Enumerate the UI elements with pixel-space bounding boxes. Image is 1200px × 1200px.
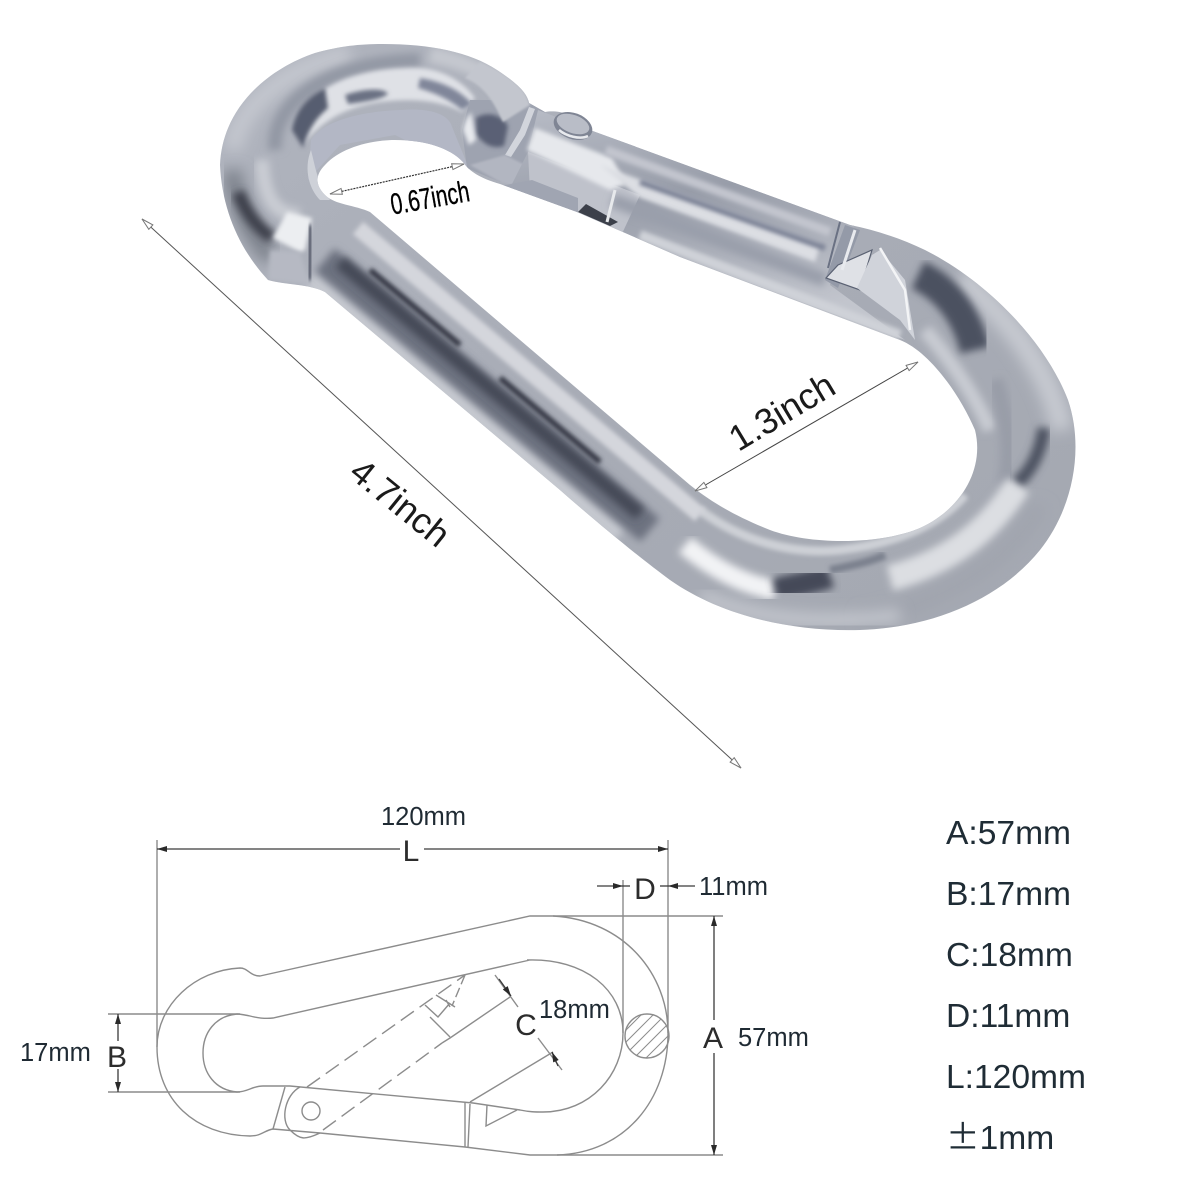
technical drawing xyxy=(108,840,723,1155)
dimension: 1.3 inch gate opening: 1.3inch xyxy=(721,364,842,459)
hook inner recess xyxy=(297,68,475,145)
dimension: 4.7 inch overall length xyxy=(142,219,741,768)
dimension lines xyxy=(108,840,723,1155)
size legend list: L:120mm xyxy=(946,1059,1086,1096)
drawing: latch xyxy=(465,975,562,1147)
size legend list: B:17mm xyxy=(946,876,1071,913)
drawing letters: A xyxy=(703,1022,723,1055)
drawing measurements: 120mm xyxy=(381,803,466,831)
dimension: 1.3 inch gate opening xyxy=(695,362,918,491)
drawing measurements: 11mm xyxy=(699,873,768,901)
drawing letters xyxy=(107,835,723,1074)
drawing: gate pin xyxy=(273,1087,320,1138)
dimension: 0.67 inch hook opening xyxy=(330,164,472,221)
shoulder bump xyxy=(273,212,312,252)
dimension arrows xyxy=(118,849,714,1155)
drawing: inner outline xyxy=(203,960,623,1112)
dimension: 0.67 inch hook opening: 0.67inch xyxy=(388,176,472,221)
size legend list: ±1mm xyxy=(946,1110,1054,1159)
right curve shading xyxy=(960,278,1062,430)
lower bar shading xyxy=(358,228,700,515)
gate body xyxy=(510,110,905,340)
size legend list xyxy=(946,815,1086,1159)
drawing measurements: 18mm xyxy=(539,996,610,1024)
shading: hook xyxy=(232,54,350,150)
pin head xyxy=(550,107,596,145)
drawing letters: B xyxy=(107,1041,127,1074)
hook flat face xyxy=(308,110,470,180)
size legend list: A:57mm xyxy=(946,815,1071,852)
size legend list: C:18mm xyxy=(946,937,1073,974)
drawing: swing gate dashed xyxy=(307,975,510,1130)
gate latch notch xyxy=(825,225,860,288)
photo: steel carabiner xyxy=(220,44,1075,630)
bottom curve shading xyxy=(860,505,1040,620)
hinge collar xyxy=(462,100,545,182)
drawing measurements: 57mm xyxy=(738,1024,809,1052)
drawing: wire section xyxy=(624,1013,670,1059)
drawing letters: L xyxy=(403,835,419,868)
size legend list: D:11mm xyxy=(946,998,1070,1035)
drawing measurements: 17mm xyxy=(20,1039,91,1067)
dimension: 4.7 inch overall length: 4.7inch xyxy=(342,450,458,555)
drawing letters: D xyxy=(634,873,656,906)
drawing letters: C xyxy=(515,1009,537,1042)
drawing: outer outline xyxy=(157,916,668,1155)
drawing measurements xyxy=(20,803,809,1067)
